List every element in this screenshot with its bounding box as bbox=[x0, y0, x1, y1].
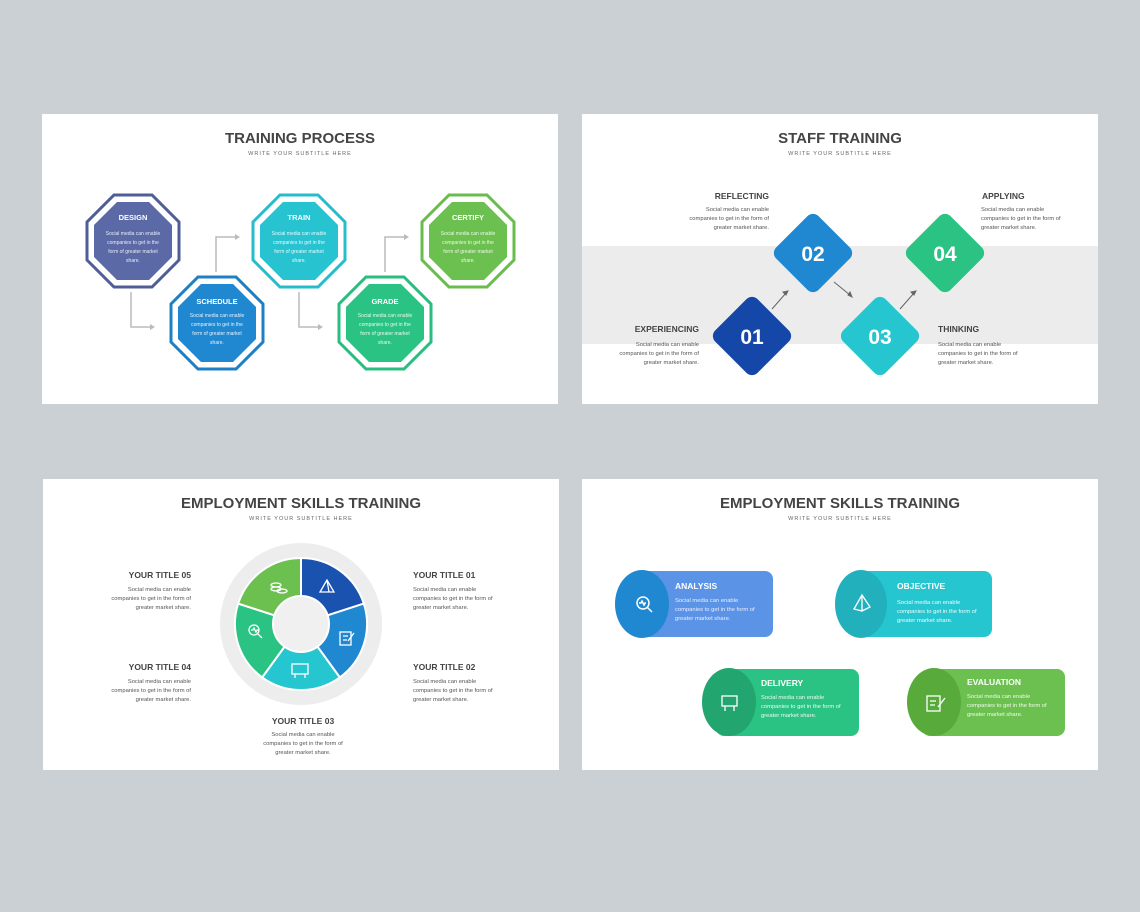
panel: staff training bbox=[582, 114, 1098, 404]
diamond 04 bbox=[903, 211, 987, 295]
title: TRAINING PROCESS bbox=[225, 130, 375, 147]
diamond 01: 01 bbox=[740, 326, 764, 349]
title: STAFF TRAINING bbox=[778, 130, 902, 147]
card: analysis: Social media can enable bbox=[675, 598, 738, 604]
text: thinking: THINKING bbox=[938, 324, 979, 334]
octagon: grade: Social media can enable bbox=[358, 313, 412, 319]
card: analysis: ANALYSIS bbox=[675, 581, 718, 591]
text: title 02 bbox=[413, 662, 493, 703]
text: title 05: greater market share. bbox=[136, 605, 191, 611]
text: title 05 bbox=[111, 570, 191, 611]
text: title 02: YOUR TITLE 02 bbox=[413, 662, 476, 672]
text: title 02: Social media can enable bbox=[413, 679, 476, 685]
text: title 03: companies to get in the form of bbox=[263, 741, 343, 747]
text: applying bbox=[981, 191, 1061, 231]
card: delivery: companies to get in the form of bbox=[761, 704, 841, 710]
text: title 03: Social media can enable bbox=[271, 732, 335, 738]
octagon: design: DESIGN bbox=[119, 213, 147, 222]
card: evaluation: greater market share. bbox=[967, 712, 1023, 718]
text: thinking: Social media can enable bbox=[938, 342, 1001, 348]
octagon: train: form of greater market bbox=[274, 249, 324, 255]
title: WRITE YOUR SUBTITLE HERE bbox=[788, 151, 892, 157]
title: WRITE YOUR SUBTITLE HERE bbox=[249, 516, 353, 522]
text: title 05: companies to get in the form of bbox=[111, 596, 191, 602]
title bbox=[720, 495, 960, 522]
title: WRITE YOUR SUBTITLE HERE bbox=[788, 516, 892, 522]
octagon: grade: share. bbox=[378, 340, 392, 346]
card: evaluation: Social media can enable bbox=[967, 694, 1030, 700]
text: applying: Social media can enable bbox=[981, 207, 1044, 213]
panel: training process bbox=[42, 114, 558, 404]
card: delivery bbox=[702, 668, 859, 736]
octagon: certify: share. bbox=[461, 258, 475, 264]
card: objective: companies to get in the form of bbox=[897, 609, 977, 615]
text: title 05: YOUR TITLE 05 bbox=[129, 570, 191, 580]
text: title 02: companies to get in the form of bbox=[413, 688, 493, 694]
text: experiencing: greater market share. bbox=[644, 360, 699, 366]
octagon: train: share. bbox=[292, 258, 306, 264]
text: title 04: greater market share. bbox=[136, 697, 191, 703]
octagon: schedule: Social media can enable bbox=[190, 313, 244, 319]
text: applying: companies to get in the form of bbox=[981, 216, 1061, 222]
text: title 04: Social media can enable bbox=[128, 679, 191, 685]
wheel chart bbox=[220, 543, 382, 705]
octagon: train: Social media can enable bbox=[272, 231, 326, 237]
text: thinking bbox=[938, 324, 1018, 366]
text: experiencing: EXPERIENCING bbox=[635, 324, 699, 334]
text: title 05: Social media can enable bbox=[128, 587, 191, 593]
panel: employment skills wheel bbox=[43, 479, 559, 770]
octagon: grade bbox=[339, 277, 431, 369]
octagon: train: companies to get in the bbox=[273, 240, 325, 246]
card: analysis: greater market share. bbox=[675, 616, 731, 622]
text: title 01: companies to get in the form of bbox=[413, 596, 493, 602]
octagon: grade: GRADE bbox=[371, 297, 399, 306]
card: objective: OBJECTIVE bbox=[897, 581, 946, 591]
octagon: certify: companies to get in the bbox=[442, 240, 494, 246]
text: reflecting: Social media can enable bbox=[706, 207, 769, 213]
text: title 01: Social media can enable bbox=[413, 587, 476, 593]
diamond 03: 03 bbox=[868, 326, 892, 349]
octagon: design: companies to get in the bbox=[107, 240, 159, 246]
octagon: certify bbox=[422, 195, 514, 287]
text: title 04 bbox=[111, 662, 191, 703]
diamond 02 bbox=[771, 211, 855, 295]
text: title 03 bbox=[263, 716, 343, 756]
title bbox=[778, 130, 902, 157]
text: title 04: companies to get in the form of bbox=[111, 688, 191, 694]
text: thinking: companies to get in the form of bbox=[938, 351, 1018, 357]
panel: employment skills cards bbox=[582, 479, 1098, 770]
card: objective: Social media can enable bbox=[897, 600, 960, 606]
card: analysis bbox=[615, 570, 773, 638]
octagon: schedule bbox=[171, 277, 263, 369]
title: EMPLOYMENT SKILLS TRAINING bbox=[181, 495, 421, 512]
octagon: grade: form of greater market bbox=[360, 331, 410, 337]
card: evaluation bbox=[907, 668, 1065, 736]
text: reflecting: companies to get in the form of bbox=[689, 216, 769, 222]
card: analysis: companies to get in the form of bbox=[675, 607, 755, 613]
octagon: design bbox=[87, 195, 179, 287]
octagon: design: share. bbox=[126, 258, 140, 264]
arrows bbox=[131, 234, 409, 330]
text: experiencing: companies to get in the form of bbox=[619, 351, 699, 357]
text: title 03: YOUR TITLE 03 bbox=[272, 716, 334, 726]
octagon: design: form of greater market bbox=[108, 249, 158, 255]
text: applying: greater market share. bbox=[981, 225, 1037, 231]
text: title 01: greater market share. bbox=[413, 605, 469, 611]
octagon: schedule: form of greater market bbox=[192, 331, 242, 337]
card: evaluation: companies to get in the form of bbox=[967, 703, 1047, 709]
text: reflecting: REFLECTING bbox=[715, 191, 769, 201]
card: objective bbox=[835, 570, 992, 638]
title bbox=[225, 130, 375, 157]
title: EMPLOYMENT SKILLS TRAINING bbox=[720, 495, 960, 512]
text: title 03: greater market share. bbox=[275, 750, 331, 756]
octagon: certify: form of greater market bbox=[443, 249, 493, 255]
text: experiencing bbox=[619, 324, 699, 366]
text: thinking: greater market share. bbox=[938, 360, 994, 366]
octagon: schedule: SCHEDULE bbox=[196, 297, 238, 306]
diamond 03 bbox=[838, 294, 922, 378]
text: title 02: greater market share. bbox=[413, 697, 469, 703]
text: title 01 bbox=[413, 570, 493, 611]
text: reflecting: greater market share. bbox=[714, 225, 769, 231]
text: applying: APPLYING bbox=[982, 191, 1025, 201]
text: title 04: YOUR TITLE 04 bbox=[129, 662, 191, 672]
text: reflecting bbox=[689, 191, 769, 231]
diamond 04: 04 bbox=[933, 243, 957, 266]
octagon: grade: companies to get in the bbox=[359, 322, 411, 328]
diamond 01 bbox=[710, 294, 794, 378]
octagon: certify: CERTIFY bbox=[452, 213, 484, 222]
card: delivery: Social media can enable bbox=[761, 695, 824, 701]
title: WRITE YOUR SUBTITLE HERE bbox=[248, 151, 352, 157]
octagon: schedule: share. bbox=[210, 340, 224, 346]
diamond 02: 02 bbox=[801, 243, 825, 266]
card: delivery: greater market share. bbox=[761, 713, 817, 719]
title bbox=[181, 495, 421, 522]
octagon: design: Social media can enable bbox=[106, 231, 160, 237]
octagon: certify: Social media can enable bbox=[441, 231, 495, 237]
arrows bbox=[772, 282, 916, 309]
text: title 01: YOUR TITLE 01 bbox=[413, 570, 476, 580]
card: objective: greater market share. bbox=[897, 618, 953, 624]
card: evaluation: EVALUATION bbox=[967, 677, 1021, 687]
card: delivery: DELIVERY bbox=[761, 678, 804, 688]
text: experiencing: Social media can enable bbox=[636, 342, 699, 348]
octagon: train bbox=[253, 195, 345, 287]
octagon: train: TRAIN bbox=[288, 213, 310, 222]
octagon: schedule: companies to get in the bbox=[191, 322, 243, 328]
